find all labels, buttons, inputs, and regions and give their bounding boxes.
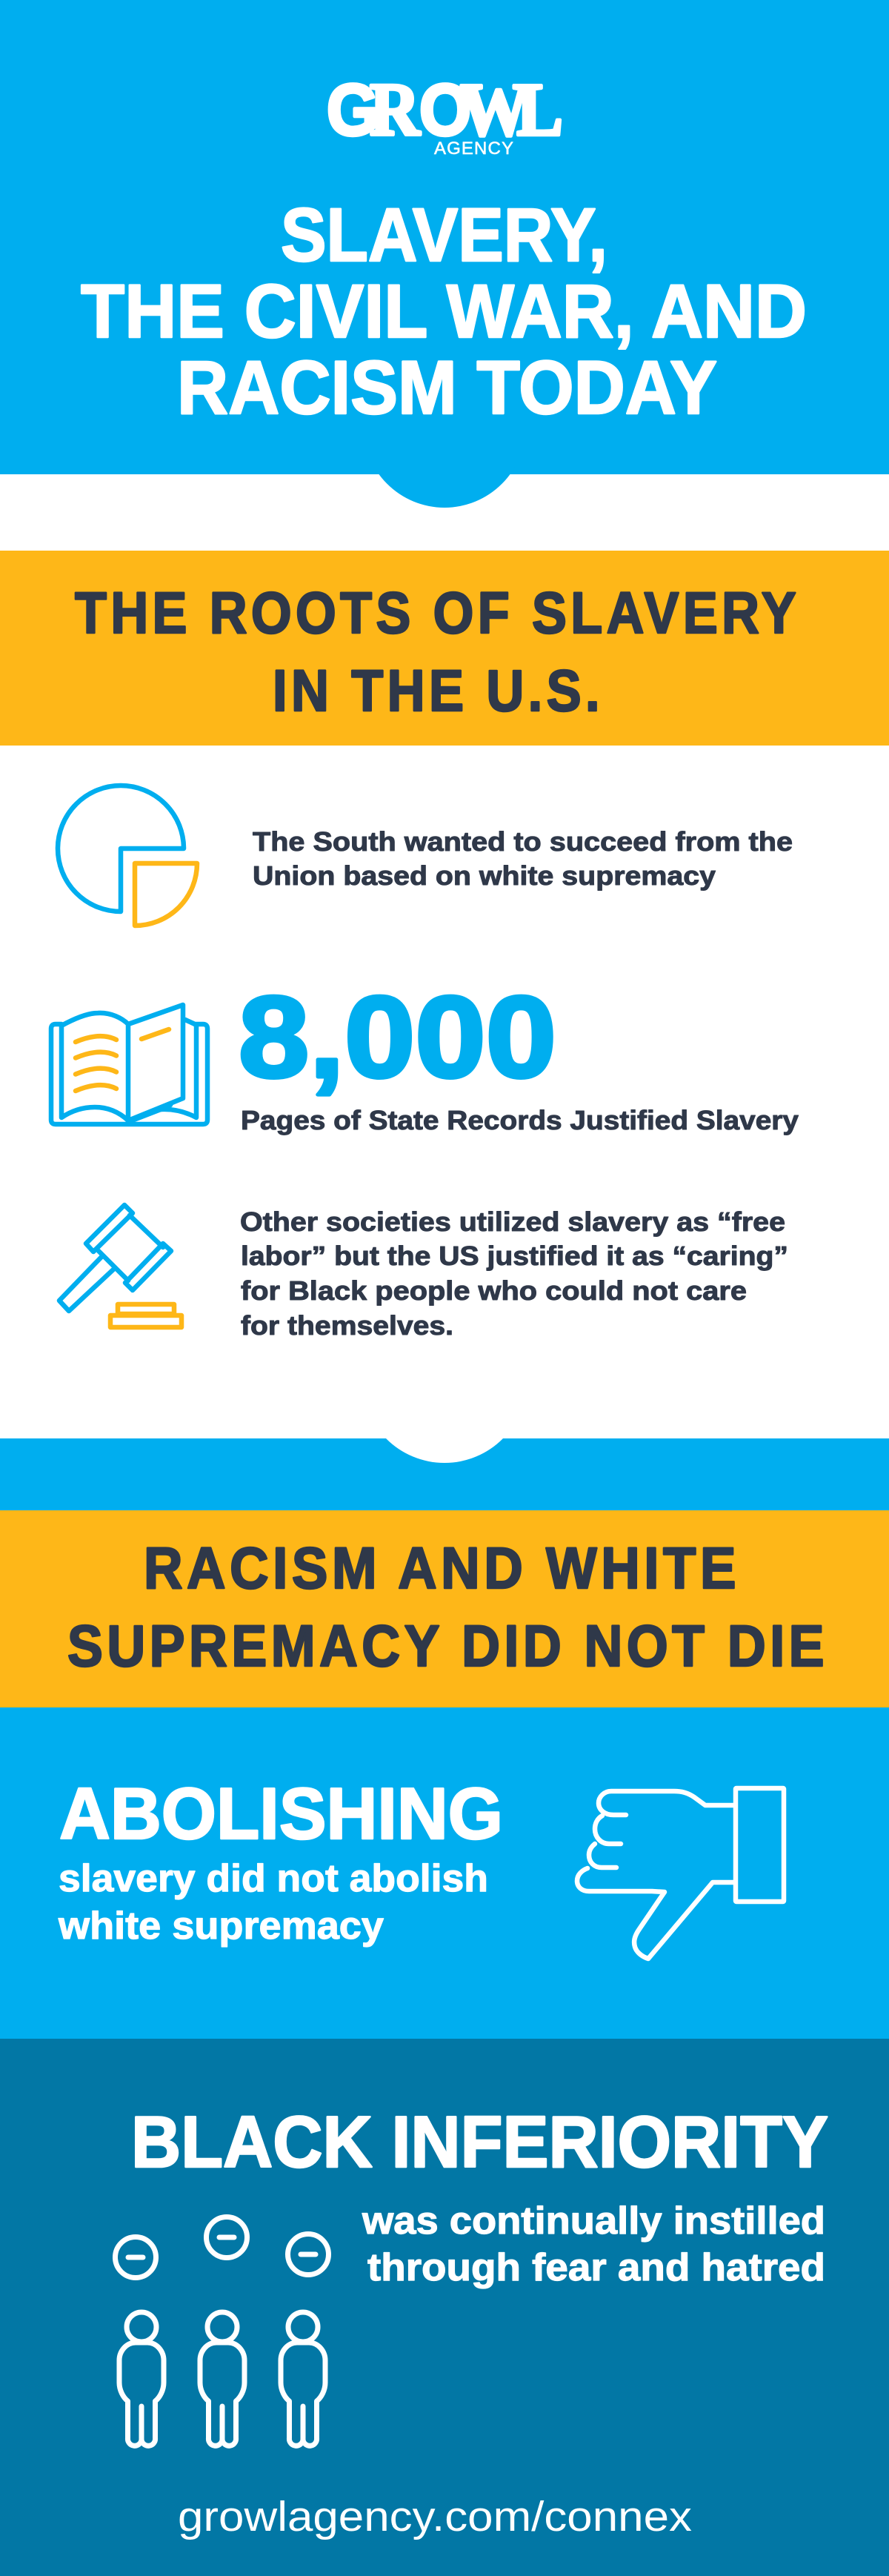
- text: continually instilled: through fear and hatred: [367, 2246, 825, 2289]
- text: slavery did not abolish: slavery did not abolish: [59, 1857, 488, 1900]
- logo: Growl Agency: O: [419, 70, 471, 150]
- text: other societies: Other societies utilized slavery as “free: [240, 1206, 785, 1237]
- icon: minus signs: [116, 2217, 329, 2278]
- title: [81, 193, 807, 430]
- title: SLAVERY,: [281, 193, 607, 277]
- panel: blue divider with notch: [0, 1438, 889, 1510]
- heading: black inferiority: BLACK INFERIORITY: [131, 2101, 828, 2182]
- text: other societies: labor” but the US justified it as “caring”: [241, 1241, 788, 1271]
- heading: abolishing: ABOLISHING: [59, 1773, 503, 1854]
- title: RACISM TODAY: [177, 345, 717, 430]
- panel: roots facts: [51, 786, 799, 1341]
- panel: roots heading: IN THE U.S.: [273, 657, 604, 723]
- panel: abolishing: [0, 1707, 889, 2039]
- logo: Growl Agency: W: [460, 68, 530, 152]
- icon: pie chart: [58, 786, 197, 926]
- text: other societies: [240, 1206, 788, 1341]
- title: THE CIVIL WAR, AND: [81, 269, 807, 353]
- panel: roots heading: THE ROOTS OF SLAVERY: [75, 580, 800, 645]
- panel: black inferiority: [0, 2039, 889, 2576]
- logo: Growl Agency: AGENCY: [434, 139, 513, 159]
- text: other societies: for themselves.: [241, 1310, 453, 1341]
- text: pages of state records: Pages of State Records Justified Slavery: [241, 1105, 799, 1135]
- footer: url: growlagency.com/connex: [178, 2493, 692, 2540]
- icon: gavel: [59, 1205, 182, 1327]
- stat: 8,000: 8,000: [239, 973, 556, 1102]
- text: other societies: for Black people who could not care: [241, 1275, 747, 1306]
- text: South succeed: The South wanted to succeed from the: [253, 826, 793, 857]
- text: South succeed: [253, 826, 793, 891]
- panel: racism heading: RACISM AND WHITE: [144, 1535, 740, 1601]
- text: continually instilled: [362, 2200, 825, 2289]
- panel: header: [0, 0, 889, 508]
- panel: racism heading: SUPREMACY DID NOT DIE: [67, 1613, 828, 1679]
- text: continually instilled: was continually instilled: [362, 2200, 825, 2243]
- text: slavery did not abolish: [58, 1857, 488, 1948]
- logo: Growl Agency: R: [370, 68, 421, 152]
- icon: three people: [119, 2312, 325, 2446]
- logo: Growl Agency: G: [327, 70, 379, 150]
- panel: roots heading: [0, 551, 889, 746]
- logo: Growl Agency: L: [516, 68, 563, 152]
- text: slavery did not abolish: white supremacy: [58, 1905, 384, 1948]
- panel: racism heading: [0, 1510, 889, 1707]
- text: South succeed: Union based on white supremacy: [253, 860, 716, 891]
- icon: thumbs down: [577, 1788, 784, 1959]
- logo: Growl Agency: [327, 68, 563, 159]
- icon: open book: [51, 1005, 207, 1124]
